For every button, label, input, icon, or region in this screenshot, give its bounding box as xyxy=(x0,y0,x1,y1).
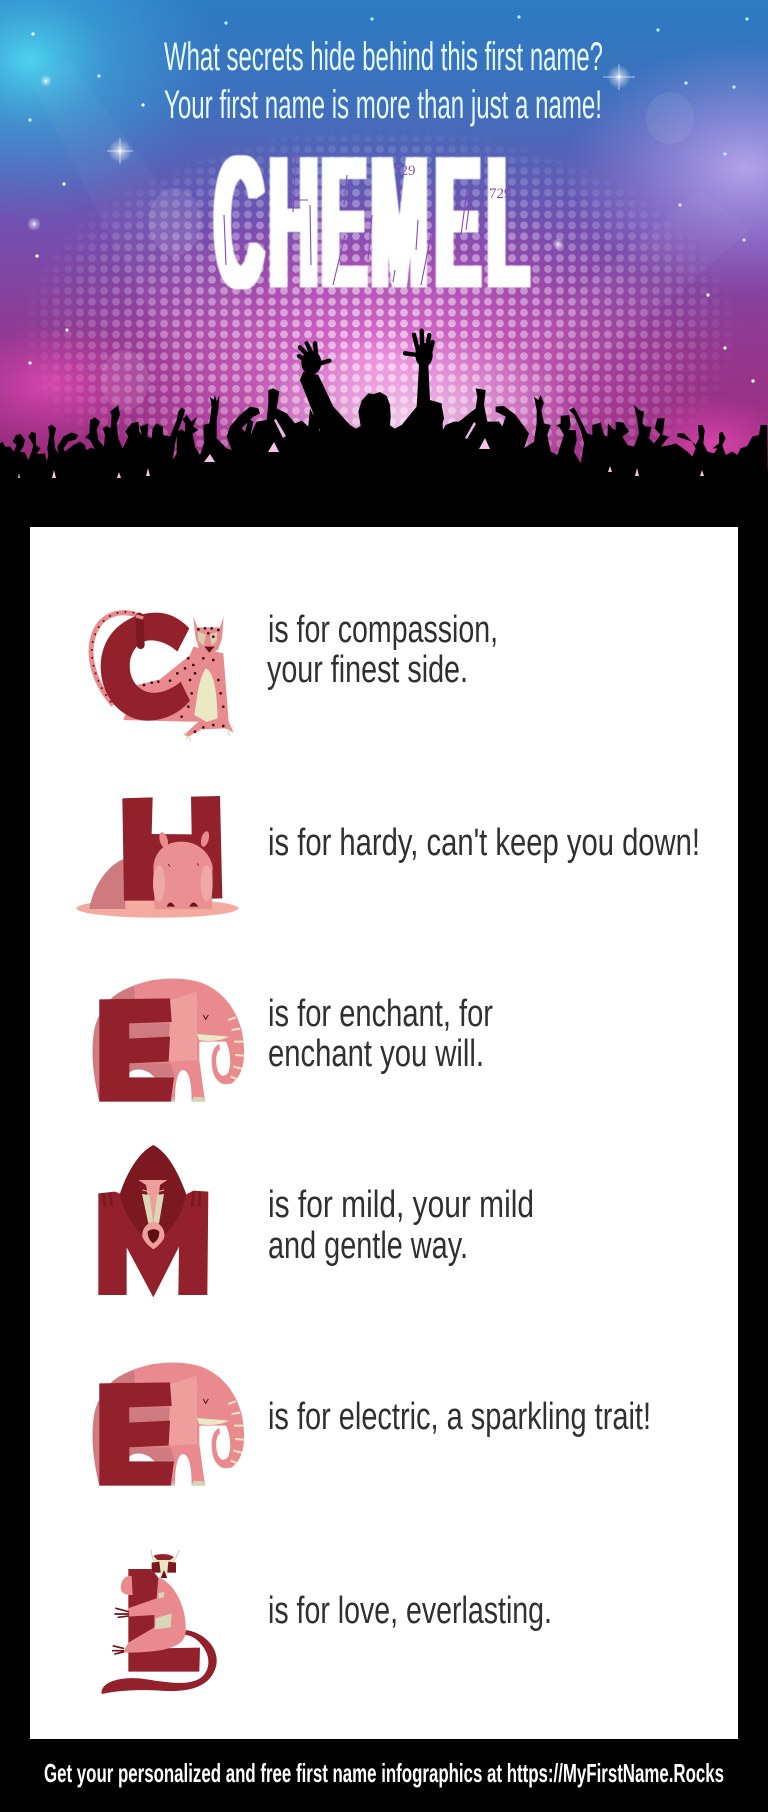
text: E enchant: is for enchant, for xyxy=(268,993,493,1035)
title: name CHEMEL: 729 xyxy=(393,163,416,179)
sparkles xyxy=(27,15,755,383)
icon: letter H hippo xyxy=(76,796,238,918)
panel: white card xyxy=(30,527,738,1739)
hero: stage lights background xyxy=(0,0,768,470)
text: M: is for mild, your mild xyxy=(268,1184,534,1226)
title: name CHEMEL: 729 xyxy=(489,186,512,202)
text: C xyxy=(267,609,498,691)
text: M: and gentle way. xyxy=(268,1225,468,1267)
text: M xyxy=(268,1184,534,1267)
text: E electric: is for electric, a sparkling trait! xyxy=(268,1396,651,1438)
text: L: is for love, everlasting. xyxy=(268,1590,552,1632)
icon: letter E elephant second xyxy=(93,1363,244,1486)
icon: letter M mandrill xyxy=(98,1145,208,1297)
text: C: your finest side. xyxy=(267,649,468,691)
icon: letter L lemur xyxy=(102,1549,217,1694)
crowd silhouette xyxy=(0,331,768,530)
title: name CHEMEL: CHEMEL xyxy=(215,117,529,327)
icon: letter E elephant xyxy=(93,979,244,1102)
crowd gaps: light slivers xyxy=(18,419,704,478)
icon: letter C leopard xyxy=(91,612,233,741)
header text xyxy=(164,35,603,127)
text: E enchant xyxy=(268,993,493,1075)
text: E enchant: enchant you will. xyxy=(268,1033,484,1075)
text: C: is for compassion, xyxy=(268,609,498,651)
